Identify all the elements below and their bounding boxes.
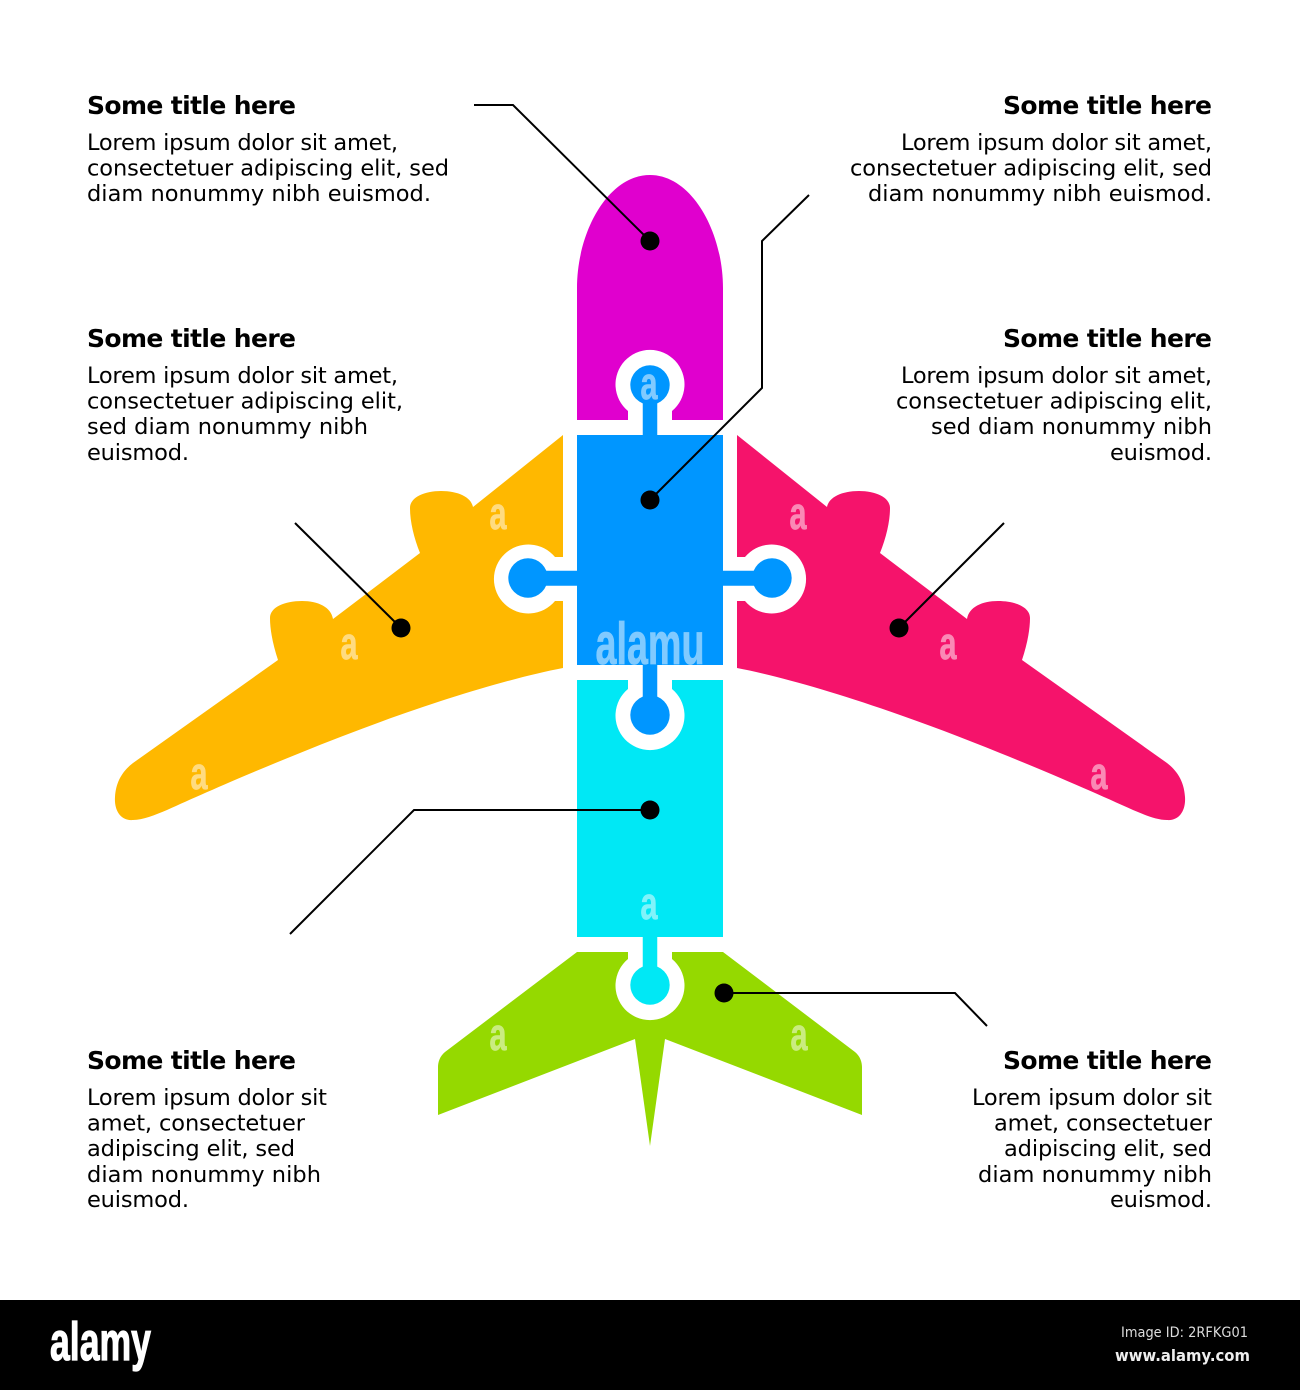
body text: adipiscing elit, sed: [1004, 1136, 1212, 1162]
body text: consectetuer adipiscing elit, sed: [87, 156, 449, 182]
body text: euismod.: [1110, 1187, 1212, 1213]
airplane puzzle: [115, 175, 1185, 1146]
watermark marks: a: [190, 748, 208, 799]
body text: [850, 130, 1212, 207]
website: www.alamy.com: [1115, 1346, 1250, 1365]
body text: diam nonummy nibh euismod.: [868, 181, 1212, 207]
body text: [896, 363, 1212, 466]
body text: diam nonummy nibh euismod.: [87, 181, 431, 207]
leader line: right wing to middle-right text: [890, 523, 1004, 638]
heading: Some title here: [1003, 1046, 1212, 1075]
body text: consectetuer adipiscing elit, sed: [850, 156, 1212, 182]
puzzle piece: left wing: [115, 435, 563, 820]
heading: Some title here: [87, 324, 296, 353]
leader line: tail to bottom-right text: [714, 984, 987, 1026]
footer logo: alamy: [50, 1312, 151, 1372]
body text: amet, consectetuer: [994, 1110, 1213, 1136]
body text: Lorem ipsum dolor sit: [972, 1085, 1212, 1111]
puzzle piece: tail: [438, 952, 862, 1146]
watermark marks: a: [340, 618, 358, 669]
watermark marks: a: [790, 488, 807, 539]
text block: middle left: [87, 324, 403, 466]
puzzle piece: rear fuselage: [577, 680, 723, 1005]
body text: Lorem ipsum dolor sit amet,: [901, 130, 1212, 156]
body text: sed diam nonummy nibh: [87, 414, 368, 440]
body text: consectetuer adipiscing elit,: [896, 388, 1212, 414]
watermark marks: a: [1090, 748, 1108, 799]
watermark marks: a: [790, 1009, 808, 1060]
body text: sed diam nonummy nibh: [931, 414, 1212, 440]
body text: [87, 1085, 327, 1213]
puzzle piece: center fuselage: [508, 365, 792, 735]
body text: Lorem ipsum dolor sit amet,: [901, 363, 1212, 389]
puzzle piece: right wing: [737, 435, 1185, 820]
body text: euismod.: [1110, 440, 1212, 466]
watermark marks: a: [490, 1009, 507, 1060]
body text: euismod.: [87, 1187, 189, 1213]
leader line: rear fuselage to bottom-left text: [290, 800, 660, 934]
heading: Some title here: [87, 91, 296, 120]
body text: [87, 363, 403, 466]
body text: Lorem ipsum dolor sit: [87, 1085, 327, 1111]
watermark marks: a: [640, 878, 658, 929]
body text: Lorem ipsum dolor sit amet,: [87, 130, 398, 156]
heading: Some title here: [1003, 91, 1212, 120]
watermark marks: a: [640, 358, 658, 409]
body text: consectetuer adipiscing elit,: [87, 388, 403, 414]
watermark marks: [190, 358, 1108, 1060]
body text: [972, 1085, 1213, 1213]
puzzle piece: nose: [577, 175, 723, 420]
text block: middle right: [896, 324, 1212, 466]
footer bar: [0, 1300, 1300, 1390]
body text: euismod.: [87, 440, 189, 466]
watermark marks: alamu: [596, 611, 704, 677]
text block: bottom right: [972, 1046, 1213, 1213]
body text: [87, 130, 449, 207]
text block: top right: [850, 91, 1212, 207]
body text: amet, consectetuer: [87, 1110, 306, 1136]
heading: Some title here: [87, 1046, 296, 1075]
body text: diam nonummy nibh: [978, 1162, 1212, 1188]
image id: Image ID: 2RFKG01: [1121, 1325, 1248, 1341]
leader line: nose to top-left text: [474, 105, 660, 250]
body text: diam nonummy nibh: [87, 1162, 321, 1188]
leader line: left wing to middle-left text: [295, 523, 410, 638]
body text: Lorem ipsum dolor sit amet,: [87, 363, 398, 389]
text block: bottom left: [87, 1046, 327, 1213]
heading: Some title here: [1003, 324, 1212, 353]
body text: adipiscing elit, sed: [87, 1136, 295, 1162]
leader line: center fuselage to top-right text: [640, 195, 809, 510]
watermark marks: a: [940, 618, 957, 669]
text block: top left: [87, 91, 449, 207]
watermark marks: a: [490, 488, 507, 539]
